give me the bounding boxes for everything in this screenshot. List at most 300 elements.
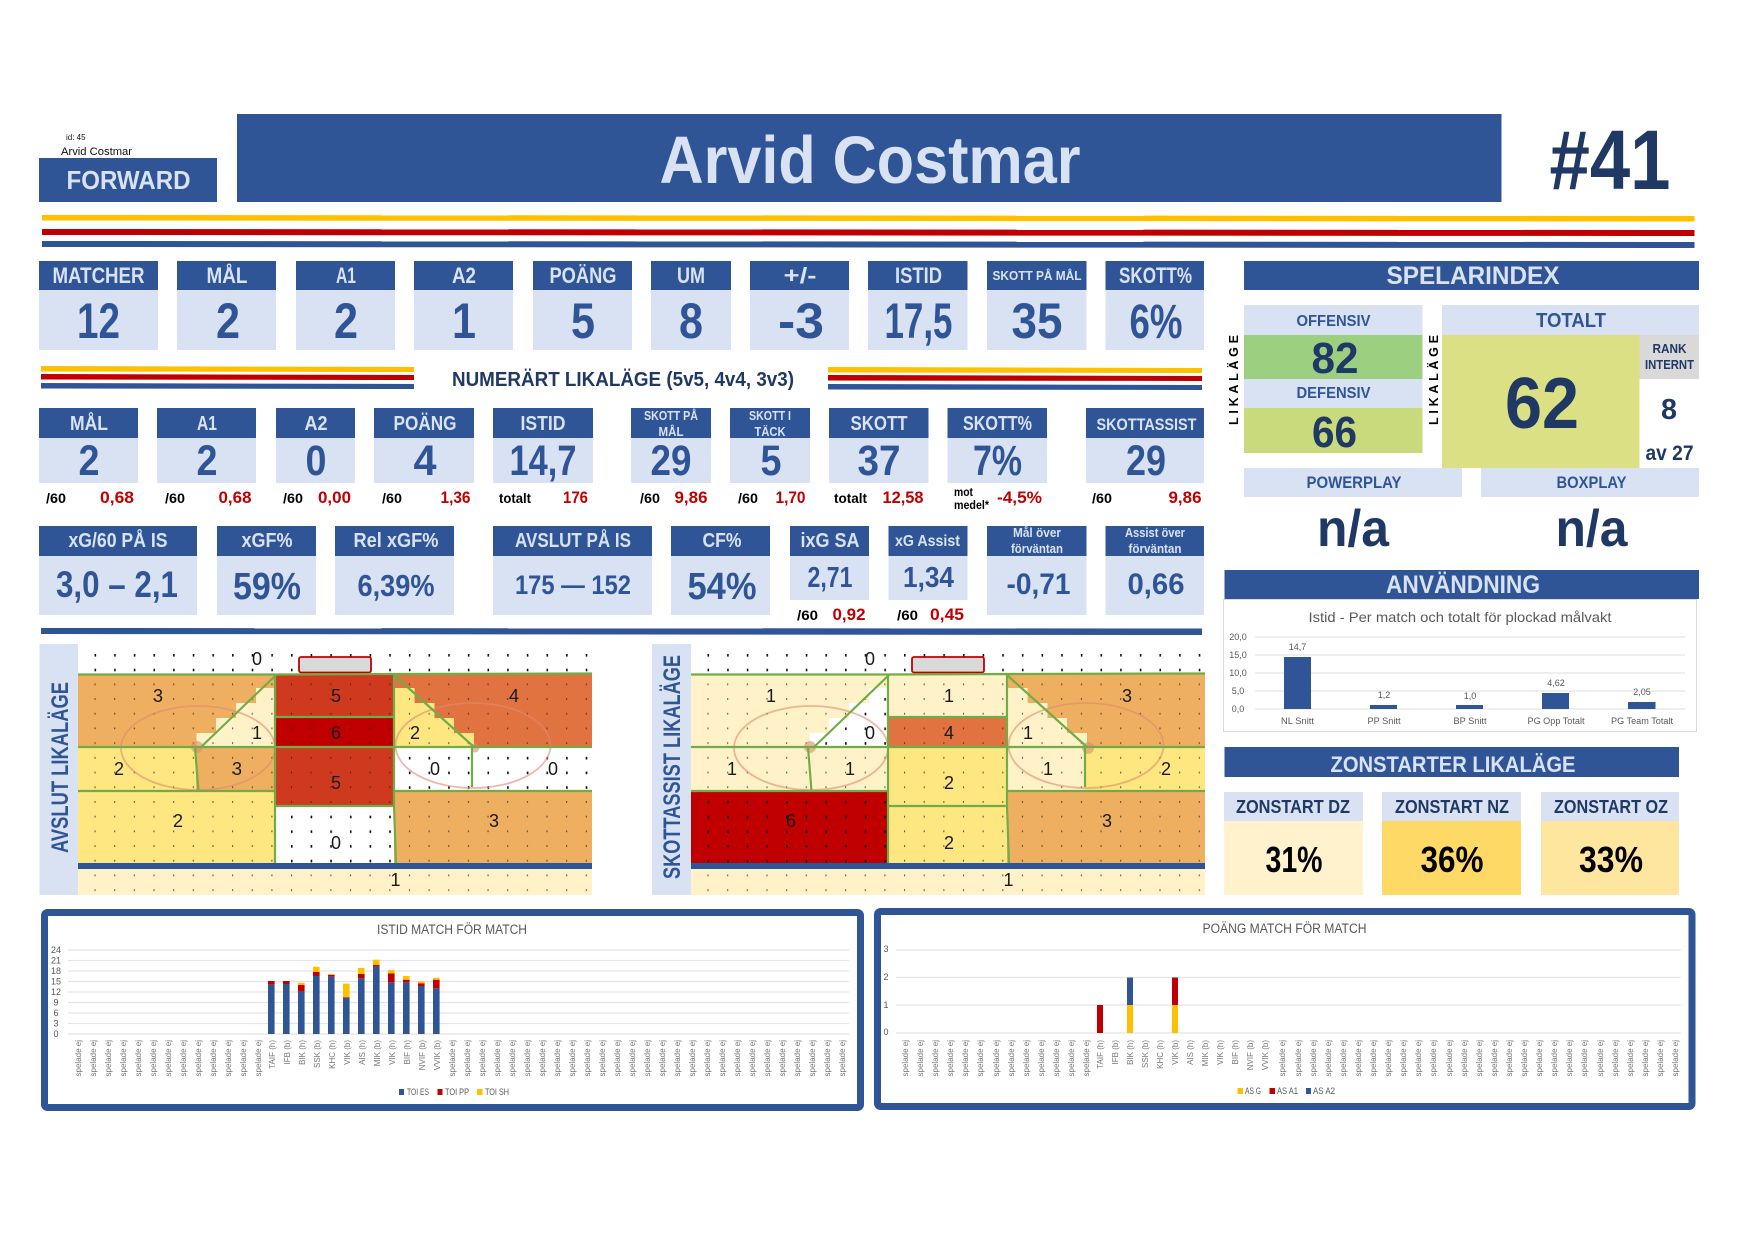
category labels: spelade ej — [493, 1040, 502, 1076]
category labels: BIF (h) — [403, 1040, 412, 1064]
zone counts: 1 — [944, 686, 954, 706]
category labels — [901, 1040, 1680, 1076]
total index — [1442, 305, 1699, 468]
y axis and gridlines: 3 — [883, 944, 889, 954]
category labels: SSK (b) — [1141, 1040, 1150, 1068]
category labels: spelade ej — [901, 1040, 910, 1076]
stat: skott i täck 5v5 — [730, 408, 810, 507]
stat: mål: 2 — [216, 293, 240, 349]
chart frame — [878, 912, 1692, 1106]
stat: istid: ISTID — [895, 263, 942, 288]
category labels: spelade ej — [1022, 1040, 1031, 1076]
internal rank: av 27 — [1646, 442, 1694, 465]
stat: a1 5v5: 2 — [196, 437, 218, 485]
category labels: spelade ej — [613, 1040, 622, 1076]
användning heading — [1224, 570, 1699, 599]
spelarindex heading — [1244, 261, 1699, 290]
category labels: IFB (b) — [1111, 1040, 1120, 1064]
heat zones — [691, 674, 1205, 895]
powerplay: n/a — [1317, 500, 1390, 558]
category labels: IFB (b) — [283, 1040, 292, 1064]
category labels: spelade ej — [916, 1040, 925, 1076]
category labels: spelade ej — [1384, 1040, 1393, 1076]
legend: TOI ES — [407, 1087, 429, 1097]
category labels: spelade ej — [119, 1040, 128, 1076]
zone counts — [727, 649, 1171, 890]
category labels: spelade ej — [778, 1040, 787, 1076]
boxplay: BOXPLAY — [1556, 473, 1627, 492]
stat: um: 8 — [679, 293, 703, 349]
category labels: spelade ej — [733, 1040, 742, 1076]
stat: skott i täck 5v5: 5 — [760, 437, 782, 485]
category labels: spelade ej — [1445, 1040, 1454, 1076]
category labels: spelade ej — [931, 1040, 940, 1076]
zone start dz: ZONSTART DZ — [1236, 797, 1350, 817]
stat: matcher: MATCHER — [52, 263, 145, 288]
category labels: VIK (b) — [1171, 1040, 1180, 1065]
zone counts: 1 — [766, 686, 776, 706]
category labels: spelade ej — [1354, 1040, 1363, 1076]
category labels: spelade ej — [823, 1040, 832, 1076]
zone counts: 2 — [173, 811, 183, 831]
legend: AS A2 — [1313, 1086, 1335, 1096]
zone counts: 5 — [331, 773, 341, 793]
stat: skott på mål 5v5: MÅL — [658, 424, 684, 439]
zone counts: 0 — [865, 649, 875, 669]
even strength stats row — [39, 408, 1204, 512]
stat: avslut på is — [493, 526, 652, 615]
stat: poäng 5v5: /60 — [382, 490, 402, 506]
category labels: spelade ej — [763, 1040, 772, 1076]
stat: a2 5v5 — [276, 408, 355, 507]
category labels: VIK (b) — [343, 1040, 352, 1065]
category labels: spelade ej — [1550, 1040, 1559, 1076]
position badge — [39, 158, 217, 202]
category labels: spelade ej — [1460, 1040, 1469, 1076]
usage bar chart: 5,0 — [1232, 686, 1244, 696]
panel: rink avslut likaläge — [40, 644, 592, 895]
dot grid — [78, 644, 592, 895]
stat: skott procent 5v5: -4,5% — [997, 488, 1042, 507]
stat: a1: 2 — [334, 293, 358, 349]
category labels: spelade ej — [1656, 1040, 1665, 1076]
title banner — [237, 114, 1502, 202]
category labels: spelade ej — [1007, 1040, 1016, 1076]
stat: istid 5v5: 176 — [563, 488, 588, 507]
dot grid — [691, 644, 1205, 895]
stat: um — [651, 261, 731, 350]
category labels: spelade ej — [838, 1040, 847, 1076]
spelarindex heading: SPELARINDEX — [1386, 262, 1560, 290]
stat: skott procent — [1106, 261, 1204, 350]
zone counts: 4 — [944, 723, 954, 743]
stat: skott på mål 5v5: SKOTT PÅ — [644, 408, 698, 423]
stat: xGF — [217, 526, 316, 615]
stat: plus minus: -3 — [778, 293, 824, 349]
usage bar chart: 15,0 — [1229, 650, 1247, 660]
side label: SKOTTASSIST LIKALÄGE — [659, 655, 686, 879]
stat: a2: A2 — [452, 263, 476, 288]
category labels: spelade ej — [1671, 1040, 1680, 1076]
stat: mål över förväntan: förväntan — [1011, 542, 1063, 556]
stat: skott i täck 5v5: /60 — [738, 490, 758, 506]
usage bar chart: 2,05 — [1633, 687, 1651, 697]
stat: skottassist 5v5: 29 — [1126, 437, 1166, 485]
player id: id: 45 — [66, 133, 86, 142]
zone counts: 3 — [232, 759, 242, 779]
zone counts: 3 — [1102, 811, 1112, 831]
zone counts: 3 — [1122, 686, 1132, 706]
zone counts: 1 — [727, 759, 737, 779]
zone counts: 1 — [1043, 759, 1053, 779]
category labels: VIK (h) — [388, 1040, 397, 1065]
zone counts: 0 — [865, 723, 875, 743]
category labels: spelade ej — [643, 1040, 652, 1076]
stat: skott procent: 6% — [1130, 296, 1182, 349]
stat: xG per 60 — [39, 526, 197, 615]
y axis and gridlines: 9 — [53, 998, 59, 1008]
zone counts: 3 — [489, 811, 499, 831]
stat: skott procent 5v5: 7% — [973, 437, 1022, 485]
stat: skott 5v5: 37 — [858, 437, 900, 485]
y axis and gridlines: 1 — [883, 1000, 889, 1010]
category labels: spelade ej — [1339, 1040, 1348, 1076]
legend: TOI SH — [485, 1087, 509, 1097]
stat: a1 5v5: 0,68 — [218, 488, 252, 507]
y axis and gridlines: 2 — [883, 972, 889, 982]
category labels: spelade ej — [194, 1040, 203, 1076]
stat: mål över förväntan: Mål över — [1013, 526, 1061, 540]
category labels: spelade ej — [1294, 1040, 1303, 1076]
zone lines — [691, 674, 1205, 864]
category labels: NVIF (b) — [1246, 1040, 1255, 1070]
boxplay: n/a — [1556, 500, 1629, 558]
zone start dz — [1224, 792, 1363, 895]
stat: skott 5v5 — [829, 408, 928, 507]
stat: matcher: 12 — [77, 293, 120, 349]
y axis and gridlines: 21 — [51, 956, 61, 966]
usage bar chart: PP Snitt — [1368, 716, 1401, 726]
zone counts: 2 — [944, 833, 954, 853]
stat: xG assist: xG Assist — [895, 533, 961, 550]
stat: skott på mål 5v5: 9,86 — [674, 488, 708, 507]
stat: xGF: 59% — [233, 566, 301, 608]
legend: TOI PP — [445, 1087, 469, 1097]
stat: skott procent: SKOTT% — [1119, 263, 1192, 288]
title banner: Arvid Costmar — [660, 123, 1080, 198]
stat: skott på mål 5v5 — [631, 408, 711, 507]
panel: istid match för match — [44, 912, 860, 1108]
category labels: spelade ej — [1535, 1040, 1544, 1076]
stat: skott i täck 5v5: SKOTT I — [749, 409, 791, 423]
usage bar chart: 10,0 — [1229, 668, 1247, 678]
section stripes left — [41, 366, 414, 389]
category labels: spelade ej — [1565, 1040, 1574, 1076]
stat: plus minus — [750, 261, 849, 350]
stat: xG per 60: xG/60 PÅ IS — [68, 528, 168, 552]
stat: mål 5v5 — [39, 408, 138, 507]
zone counts: 5 — [331, 686, 341, 706]
stat: skott på mål — [987, 261, 1086, 350]
stat: skottassist 5v5: 9,86 — [1168, 488, 1202, 507]
stat: a2 — [414, 261, 513, 350]
zone counts: 2 — [410, 723, 420, 743]
zone counts: 6 — [331, 723, 341, 743]
stat: rel xGF — [335, 526, 454, 615]
zone counts: 0 — [548, 759, 558, 779]
stat: avslut på is: 175 — 152 — [515, 570, 631, 600]
stat: poäng 5v5: POÄNG — [394, 412, 456, 435]
y axis and gridlines — [883, 944, 1681, 1037]
category labels: KHC (h) — [328, 1040, 337, 1069]
y axis and gridlines: 0 — [883, 1027, 889, 1037]
stat: mål 5v5: MÅL — [70, 411, 108, 435]
stat: CF: 54% — [688, 566, 756, 608]
y axis and gridlines: 0 — [53, 1029, 59, 1039]
offensive index: OFFENSIV — [1296, 313, 1371, 330]
side label — [652, 644, 691, 895]
stat: mål 5v5: 0,68 — [100, 488, 134, 507]
stat: ixG SA: /60 — [797, 607, 818, 623]
category labels: VVIK (b) — [433, 1040, 442, 1070]
category labels: spelade ej — [992, 1040, 1001, 1076]
category labels: TAIF (h) — [1096, 1040, 1105, 1069]
category labels: spelade ej — [1580, 1040, 1589, 1076]
zone counts: 1 — [845, 759, 855, 779]
usage bar chart: 0,0 — [1232, 704, 1244, 714]
vertical label right: LIKALÄGE — [1426, 335, 1441, 425]
category labels: spelade ej — [1052, 1040, 1061, 1076]
internal rank: 8 — [1661, 394, 1677, 426]
expected goals stats row — [39, 526, 1204, 624]
stat: skott 5v5: 12,58 — [882, 488, 924, 507]
category labels: spelade ej — [808, 1040, 817, 1076]
section stripes right — [828, 367, 1202, 390]
section heading: NUMERÄRT LIKALÄGE (5v5, 4v4, 3v3) — [452, 368, 794, 391]
divider bar — [41, 628, 1202, 635]
category labels: AIS (h) — [1186, 1040, 1195, 1065]
stat: poäng 5v5: 4 — [414, 437, 437, 485]
usage bar chart: PG Team Totalt — [1611, 716, 1674, 726]
stat: skott i täck 5v5: TÄCK — [754, 424, 786, 439]
stat: a2 5v5: A2 — [304, 413, 328, 435]
stat: xGF: xGF% — [242, 530, 293, 552]
category labels: spelade ej — [224, 1040, 233, 1076]
category labels: spelade ej — [463, 1040, 472, 1076]
defensive index — [1244, 379, 1422, 457]
zone counts: 1 — [252, 723, 262, 743]
stat: a1: A1 — [336, 263, 356, 288]
category labels: spelade ej — [164, 1040, 173, 1076]
boxplay — [1481, 468, 1699, 558]
category labels: BIF (h) — [1231, 1040, 1240, 1064]
category labels: spelade ej — [961, 1040, 970, 1076]
stat: rel xGF: Rel xGF% — [354, 530, 439, 552]
category labels: spelade ej — [104, 1040, 113, 1076]
zone start dz: 31% — [1266, 839, 1322, 880]
usage bar chart: 20,0 — [1229, 632, 1247, 642]
stat: istid 5v5: 14,7 — [510, 437, 576, 485]
stat: istid — [868, 261, 968, 350]
usage bar chart: BP Snitt — [1454, 716, 1487, 726]
stat: skott procent 5v5: SKOTT% — [963, 413, 1032, 435]
category labels: spelade ej — [976, 1040, 985, 1076]
category labels: spelade ej — [598, 1040, 607, 1076]
legend — [399, 1087, 509, 1097]
offensive index: 82 — [1312, 334, 1358, 383]
category labels: spelade ej — [1278, 1040, 1287, 1076]
total index: 62 — [1505, 364, 1579, 444]
stat: skott procent 5v5: mot — [954, 487, 973, 499]
stat: skott 5v5: SKOTT — [850, 413, 908, 435]
category labels: SSK (b) — [313, 1040, 322, 1068]
category labels: spelade ej — [179, 1040, 188, 1076]
category labels: spelade ej — [1490, 1040, 1499, 1076]
stat: skottassist 5v5 — [1086, 408, 1204, 507]
side label: AVSLUT LIKALÄGE — [47, 682, 74, 853]
goal — [299, 657, 371, 672]
category labels: spelade ej — [1399, 1040, 1408, 1076]
y axis and gridlines: 3 — [53, 1018, 59, 1028]
category labels: spelade ej — [134, 1040, 143, 1076]
zone start oz: ZONSTART OZ — [1554, 797, 1668, 817]
blue line — [78, 863, 592, 869]
category labels: BIK (h) — [298, 1040, 307, 1065]
zone start nz: ZONSTART NZ — [1395, 797, 1509, 817]
y axis and gridlines: 12 — [51, 987, 61, 997]
side label — [40, 644, 78, 895]
stat: xG per 60: 3,0 – 2,1 — [56, 564, 178, 605]
category labels: spelade ej — [1429, 1040, 1438, 1076]
stat: poäng 5v5 — [374, 408, 474, 507]
category labels: spelade ej — [583, 1040, 592, 1076]
category labels: spelade ej — [658, 1040, 667, 1076]
total index: TOTALT — [1536, 310, 1606, 332]
category labels: spelade ej — [1309, 1040, 1318, 1076]
category labels: spelade ej — [1324, 1040, 1333, 1076]
stat: mål över förväntan: -0,71 — [1006, 568, 1070, 601]
goal — [912, 657, 984, 672]
y axis and gridlines: 6 — [53, 1008, 59, 1018]
legend: AS A1 — [1277, 1086, 1298, 1096]
y axis and gridlines: 24 — [51, 945, 61, 955]
stat: a1 5v5: /60 — [165, 490, 185, 506]
stat: CF: CF% — [702, 530, 742, 552]
panel: poäng match för match — [878, 912, 1692, 1106]
defensive index: DEFENSIV — [1296, 385, 1371, 402]
category labels: KHC (h) — [1156, 1040, 1165, 1069]
stat: rel xGF: 6,39% — [358, 568, 434, 603]
panel: användning — [1224, 570, 1699, 732]
stat: CF — [671, 526, 770, 615]
stat: mål över förväntan — [987, 526, 1086, 615]
category labels: spelade ej — [523, 1040, 532, 1076]
zone counts: 1 — [1003, 870, 1014, 890]
category labels: NVIF (b) — [418, 1040, 427, 1070]
stat: matcher — [39, 261, 158, 350]
category labels — [74, 1040, 847, 1076]
stat: ixG SA: ixG SA — [800, 530, 860, 552]
stat: a2 5v5: 0 — [306, 437, 326, 485]
stacked bars — [268, 960, 440, 1034]
category labels: spelade ej — [1505, 1040, 1514, 1076]
stat: istid 5v5 — [493, 408, 593, 507]
stat: skott på mål 5v5: 29 — [650, 437, 692, 485]
header stripes — [42, 215, 1694, 248]
category labels: MIK (b) — [373, 1040, 382, 1066]
stat: skott på mål 5v5: /60 — [640, 490, 660, 506]
category labels: spelade ej — [1596, 1040, 1605, 1076]
stat: a1 — [296, 261, 395, 350]
category labels: spelade ej — [1626, 1040, 1635, 1076]
stat: istid: 17,5 — [884, 293, 952, 349]
användning heading: ANVÄNDNING — [1386, 571, 1540, 599]
stat: skott 5v5: totalt — [834, 490, 867, 506]
category labels: AIS (h) — [358, 1040, 367, 1065]
category labels: VVIK (b) — [1261, 1040, 1270, 1070]
category labels: spelade ej — [628, 1040, 637, 1076]
stat: skottassist 5v5: /60 — [1092, 490, 1112, 506]
zone counts: 4 — [509, 686, 519, 706]
category labels: spelade ej — [209, 1040, 218, 1076]
internal rank — [1640, 335, 1699, 465]
stat: poäng 5v5: 1,36 — [440, 488, 470, 507]
zone counts: 2 — [1161, 759, 1171, 779]
stat: poäng: 5 — [571, 293, 595, 349]
category labels: spelade ej — [448, 1040, 457, 1076]
stat: assist över förväntan: förväntan — [1128, 542, 1182, 556]
zonstarter heading — [1224, 747, 1679, 777]
usage bar chart: 14,7 — [1289, 642, 1306, 652]
zonstarter heading: ZONSTARTER LIKALÄGE — [1330, 752, 1576, 777]
stat: skott procent 5v5 — [948, 408, 1047, 512]
zone counts: 3 — [153, 686, 163, 706]
stat: skott på mål: 35 — [1012, 293, 1062, 349]
panel: spelarindex — [1226, 261, 1699, 558]
category labels: spelade ej — [74, 1040, 83, 1076]
stat: a2 5v5: 0,00 — [318, 488, 351, 507]
usage bar chart: 4,62 — [1547, 678, 1565, 688]
stat: xG assist: 0,45 — [930, 605, 964, 624]
stat: mål 5v5: 2 — [78, 437, 100, 485]
stat: skottassist 5v5: SKOTTASSIST — [1096, 415, 1197, 434]
y axis and gridlines: 18 — [51, 966, 61, 976]
stat: mål: MÅL — [206, 262, 248, 288]
category labels: spelade ej — [793, 1040, 802, 1076]
defensive index: 66 — [1312, 408, 1357, 457]
panel: zonstarter — [1224, 747, 1679, 895]
heat zones — [78, 674, 592, 895]
category labels: spelade ej — [1641, 1040, 1650, 1076]
stat: ixG SA — [790, 526, 869, 624]
category labels: spelade ej — [1369, 1040, 1378, 1076]
player name small: Arvid Costmar — [61, 146, 132, 158]
chart frame — [44, 912, 860, 1108]
zone counts: 1 — [1023, 723, 1033, 743]
chart title: POÄNG MATCH FÖR MATCH — [1202, 921, 1366, 936]
stat: um: UM — [677, 263, 705, 288]
jersey number: #41 — [1550, 113, 1670, 207]
stat: plus minus: +/- — [784, 263, 816, 288]
category labels: spelade ej — [1414, 1040, 1423, 1076]
season stats row — [39, 261, 1204, 350]
category labels: spelade ej — [1611, 1040, 1620, 1076]
category labels: spelade ej — [553, 1040, 562, 1076]
stat: istid 5v5: totalt — [499, 490, 531, 506]
category labels: spelade ej — [1082, 1040, 1091, 1076]
y axis and gridlines — [51, 945, 849, 1039]
stat: xG assist: /60 — [897, 607, 918, 623]
